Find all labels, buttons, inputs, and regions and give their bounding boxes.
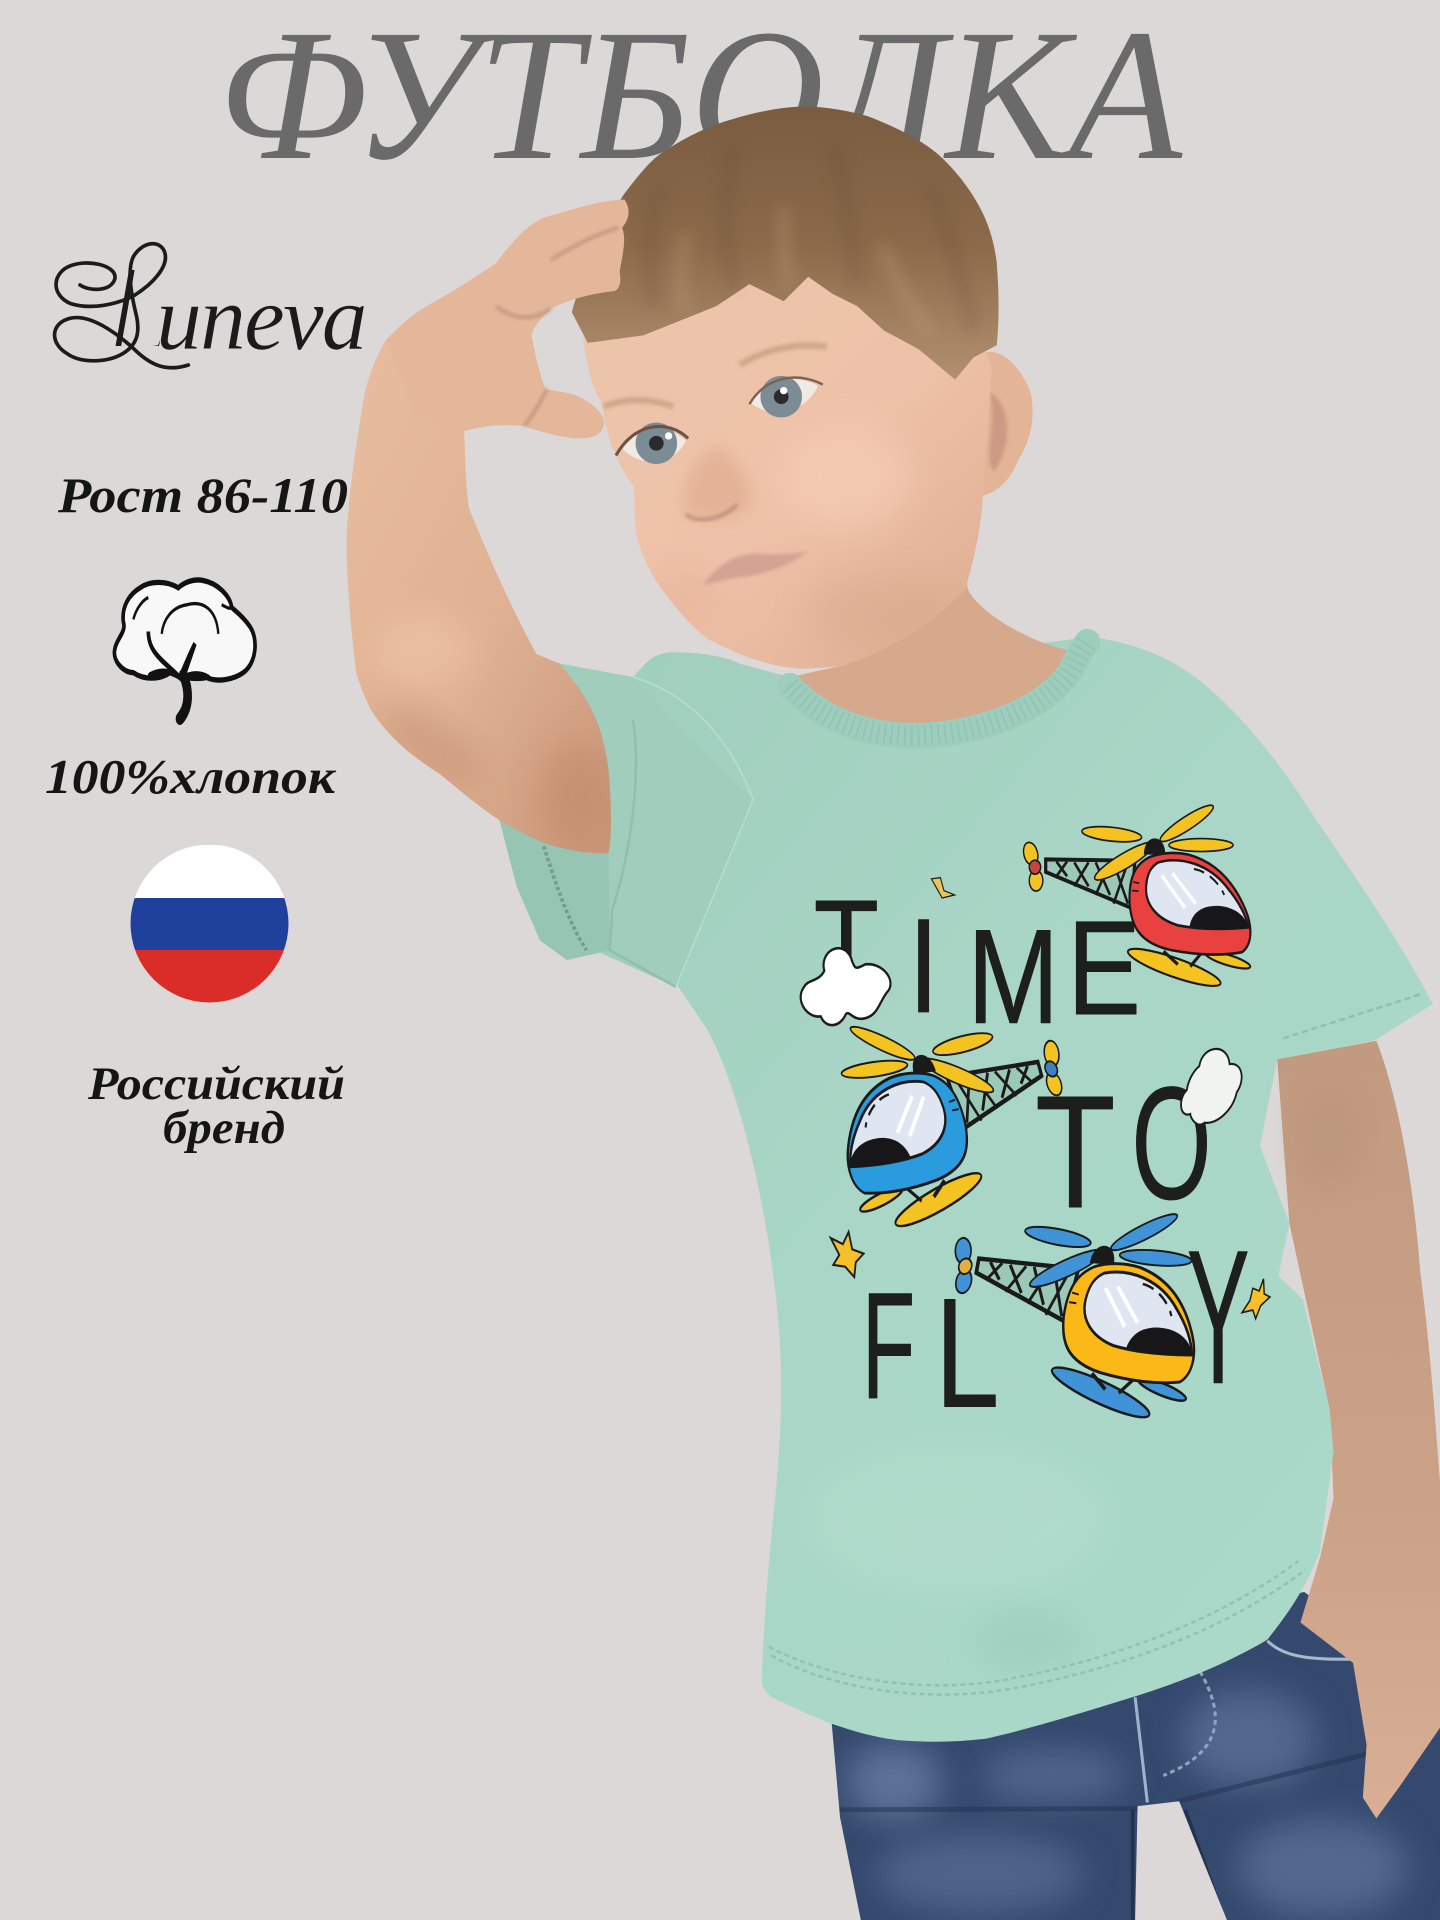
star left — [831, 1232, 864, 1277]
mouth — [703, 551, 808, 585]
raised arm — [347, 340, 612, 853]
icon: cotton boll — [114, 580, 255, 719]
logo swash — [55, 244, 188, 368]
red helicopter — [1021, 800, 1251, 993]
icon: russian flag — [130, 845, 290, 1003]
print lettering: time to fly: O — [1131, 1054, 1212, 1233]
print lettering: time to fly: T — [1035, 1063, 1116, 1242]
face — [583, 263, 992, 669]
hair — [572, 107, 999, 380]
logo: Luneva: uneva — [156, 267, 366, 369]
print lettering: time to fly: F — [862, 1262, 915, 1431]
left sleeve shading — [500, 820, 610, 960]
height text: Рост 86-110 — [57, 467, 348, 523]
collar — [790, 642, 1087, 736]
print lettering: time to fly: L — [935, 1267, 999, 1441]
neck — [790, 527, 1078, 725]
cloud right — [1181, 1049, 1242, 1125]
eyebrows — [604, 346, 827, 407]
print lettering: time to fly: Y — [1187, 1210, 1250, 1423]
logo: Luneva: L — [101, 239, 173, 377]
cloud left — [801, 948, 890, 1025]
star top — [931, 878, 955, 898]
boy wearing the t-shirt — [347, 107, 1440, 1920]
jeans — [820, 1580, 1440, 1920]
yellow helicopter — [924, 1190, 1221, 1428]
t-shirt — [500, 637, 1433, 1742]
brand origin text — [87, 1058, 345, 1154]
hem stitching — [769, 1561, 1298, 1685]
cotton text: 100%хлопок — [45, 749, 336, 804]
print lettering: time to fly: T — [814, 874, 879, 1019]
hand on head — [386, 200, 629, 438]
shirt lighting — [808, 1445, 1102, 1592]
logo: Luneva — [55, 239, 366, 377]
arm with hand in pocket — [1277, 1041, 1440, 1818]
t-shirt print — [801, 800, 1270, 1441]
print lettering: time to fly — [814, 874, 1250, 1441]
brand origin text: бренд — [163, 1102, 285, 1154]
ear — [958, 352, 1033, 496]
brand origin text: Российский — [87, 1058, 345, 1110]
eye left — [621, 428, 686, 462]
blue helicopter — [809, 993, 1103, 1239]
eye right — [749, 379, 818, 412]
star right — [1242, 1279, 1270, 1319]
nose — [684, 447, 752, 520]
print lettering: time to fly: IME — [908, 892, 1141, 1052]
